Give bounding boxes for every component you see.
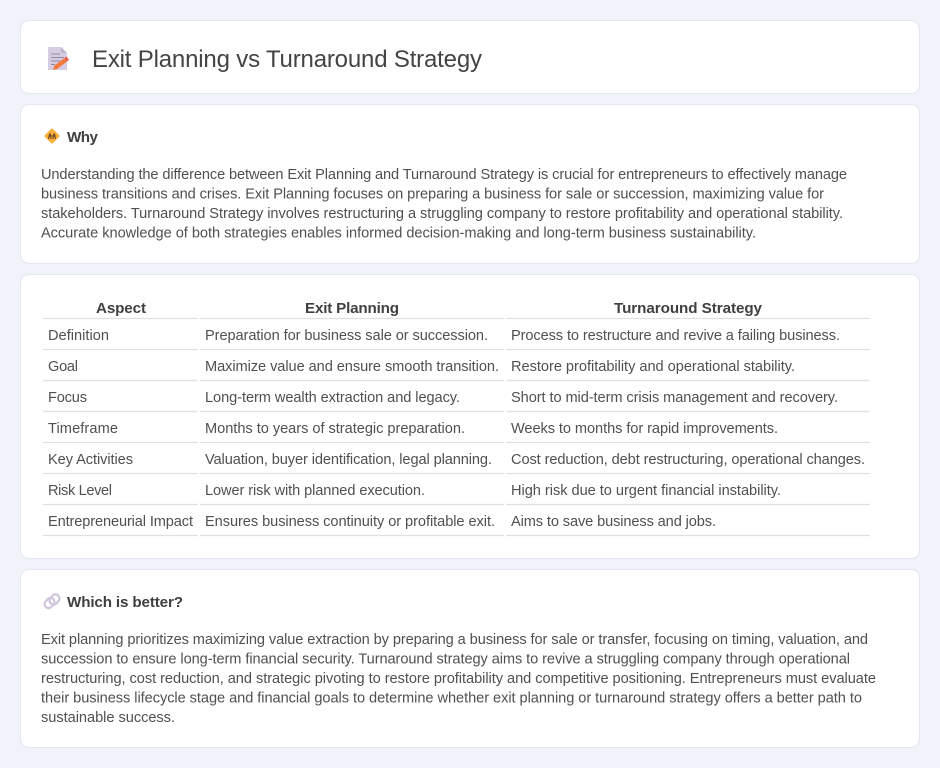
row: key activities: Key Activities — [48, 452, 133, 468]
row: timeframe — [48, 421, 778, 437]
text block: which is better paragraph: their business lifecycle stage and financial goals to determine whether exit planning or turnaround strategy offers a better path to — [41, 690, 862, 706]
title: Exit Planning vs Turnaround Strategy — [92, 46, 482, 73]
text block: which is better paragraph: restructuring, cost reduction, and strategic pivoting to restore profitability and competitive positioning. Entrepreneurs must evaluate — [41, 671, 876, 687]
icon: link — [43, 593, 61, 610]
text block: why paragraph: Understanding the difference between Exit Planning and Turnaround Strategy is crucial for entrepreneurs to effectively manage — [41, 167, 847, 183]
row: goal — [48, 359, 795, 375]
row: key activities — [48, 452, 865, 468]
row: definition: Preparation for business sale or succession. — [205, 328, 488, 344]
table row lines — [43, 318, 870, 536]
row: goal: Goal — [48, 359, 78, 375]
row: entrepreneurial impact: Aims to save business and jobs. — [511, 514, 716, 530]
row: goal: Restore profitability and operational stability. — [511, 359, 795, 375]
text block: which is better paragraph: Exit planning prioritizes maximizing value extraction by preparing a business for sale or transfer, focusing on timing, valuation, and — [41, 632, 868, 648]
panel: title header — [20, 20, 920, 94]
icon: document with pencil — [48, 47, 69, 70]
table header: Exit Planning — [305, 300, 399, 317]
text block: why paragraph: stakeholders. Turnaround Strategy involves restructuring a struggling company to restore profitability and operational stability. — [41, 206, 843, 222]
text block: why paragraph: business transitions and crises. Exit Planning focuses on preparing a business for sale or succession, maximizing value for — [41, 186, 824, 202]
table header: Aspect — [96, 300, 146, 317]
row: definition: Definition — [48, 328, 109, 344]
row: risk level — [48, 483, 781, 499]
row: risk level: Lower risk with planned execution. — [205, 483, 425, 499]
text block: which is better paragraph: succession to ensure long-term financial security. Turnaround strategy aims to revive a struggling company through operational — [41, 652, 850, 668]
row: timeframe: Timeframe — [48, 421, 118, 437]
row: timeframe: Months to years of strategic preparation. — [205, 421, 465, 437]
icon: warning diamond — [44, 128, 60, 144]
row: timeframe: Weeks to months for rapid improvements. — [511, 421, 778, 437]
row: key activities: Cost reduction, debt restructuring, operational changes. — [511, 452, 865, 468]
table header: Turnaround Strategy — [614, 300, 763, 317]
text block: why paragraph — [41, 167, 847, 242]
row: focus: Focus — [48, 390, 87, 406]
panel: why — [20, 104, 920, 264]
row: entrepreneurial impact — [48, 514, 716, 530]
text block: which is better paragraph: sustainable success. — [41, 710, 175, 726]
row: definition: Process to restructure and revive a failing business. — [511, 328, 840, 344]
text block: why paragraph: Accurate knowledge of both strategies enables informed decision-making and long-term business sustainability. — [41, 226, 756, 242]
row: entrepreneurial impact: Entrepreneurial Impact — [48, 514, 193, 530]
row: key activities: Valuation, buyer identification, legal planning. — [205, 452, 492, 468]
heading: which is better: Which is better? — [67, 594, 183, 611]
panel: which is better — [20, 570, 920, 748]
row: entrepreneurial impact: Ensures business continuity or profitable exit. — [205, 514, 495, 530]
table header — [96, 300, 763, 317]
row: definition — [48, 328, 840, 344]
text block: which is better paragraph — [41, 632, 876, 726]
row: goal: Maximize value and ensure smooth transition. — [205, 359, 499, 375]
row: focus: Short to mid-term crisis management and recovery. — [511, 390, 838, 406]
row: focus: Long-term wealth extraction and legacy. — [205, 390, 460, 406]
heading: why: Why — [67, 129, 99, 146]
row: risk level: Risk Level — [48, 483, 112, 499]
row: risk level: High risk due to urgent financial instability. — [511, 483, 781, 499]
row: focus — [48, 390, 838, 406]
panel: comparison table — [20, 274, 920, 558]
